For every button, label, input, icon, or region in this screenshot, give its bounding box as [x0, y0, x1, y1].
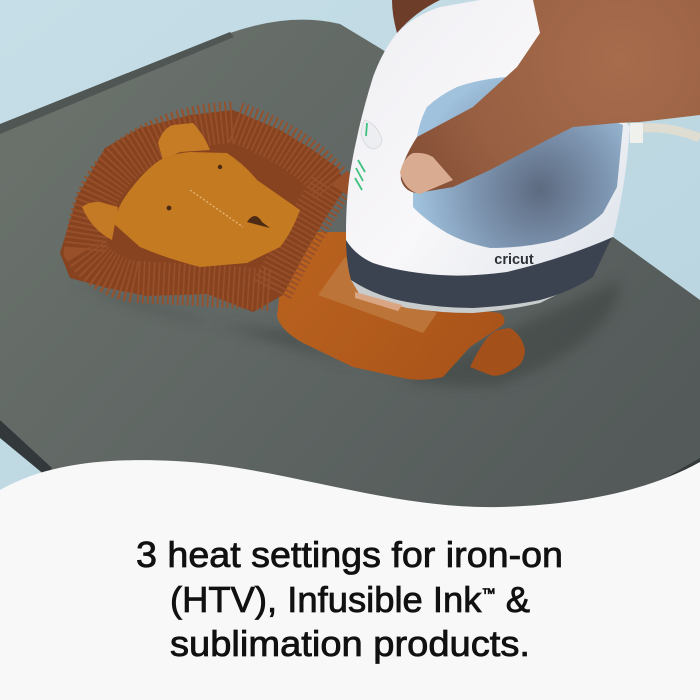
mane fringe	[85, 122, 332, 290]
press body	[346, 0, 630, 276]
hand	[392, 0, 700, 194]
Cricut mini press	[346, 0, 630, 313]
lion tail	[470, 328, 525, 376]
heat transfer patch	[318, 257, 437, 333]
lion eyes and nose	[167, 165, 270, 228]
setting button	[361, 120, 382, 149]
lion ear top	[158, 123, 210, 160]
photo background	[0, 0, 700, 520]
caption: &	[496, 579, 530, 620]
caption	[136, 534, 563, 664]
press base band	[346, 235, 613, 308]
thumbnail	[400, 153, 453, 194]
fingers behind the press	[392, 0, 440, 33]
caption: (HTV), Infusible Ink	[170, 579, 478, 620]
lion body	[277, 232, 504, 380]
heat plate edge	[351, 277, 593, 313]
soft shadow under toy and press	[70, 280, 620, 386]
heat indicator lights	[355, 123, 367, 190]
peach tab	[355, 292, 402, 311]
ironing mat	[0, 20, 700, 510]
thumb and palm	[401, 0, 700, 193]
brand logo: cricut	[494, 252, 534, 268]
lion mane base	[60, 110, 346, 312]
lion ear left	[82, 202, 118, 240]
white wave panel	[0, 460, 700, 700]
lion toy	[60, 110, 525, 380]
press window	[413, 77, 623, 248]
caption: sublimation products.	[170, 623, 530, 664]
caption: 3 heat settings for iron-on	[136, 534, 563, 575]
lion face	[113, 152, 300, 267]
caption: ™	[481, 585, 496, 601]
cord	[630, 123, 700, 143]
